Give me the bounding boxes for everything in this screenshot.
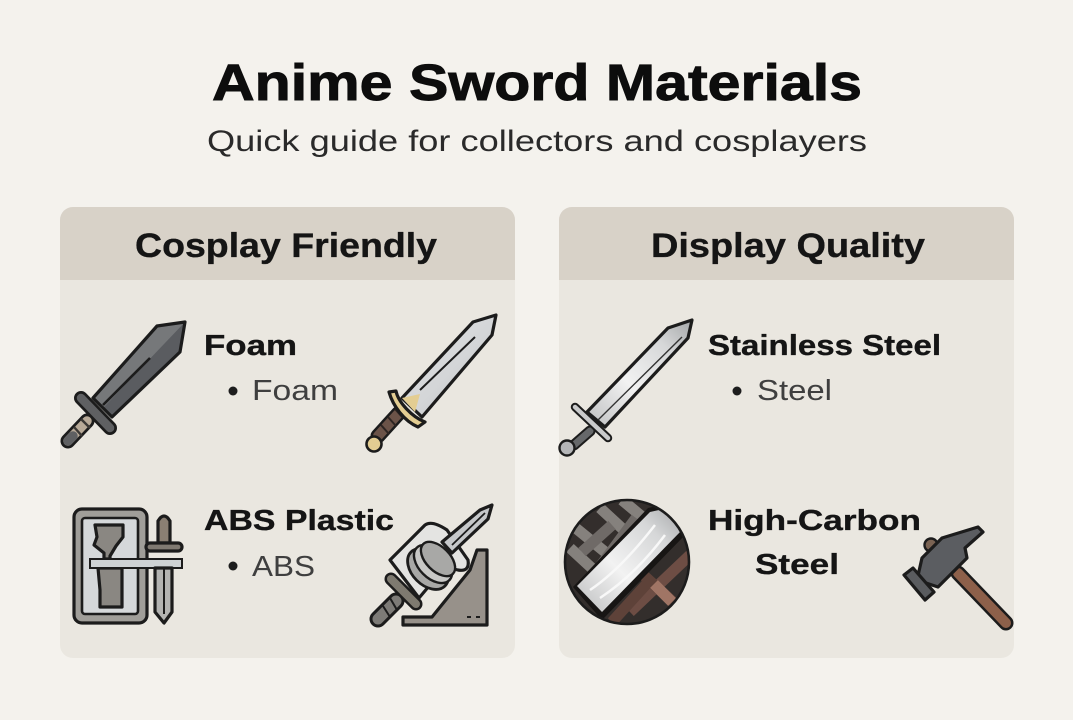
item: stainless steel: Stainless Steel bbox=[708, 330, 941, 362]
panel header: display quality bbox=[559, 207, 1014, 280]
item: foam bbox=[204, 330, 338, 407]
item: abs plastic: ABS bbox=[252, 551, 315, 583]
subtitle: Quick guide for collectors and cosplayers bbox=[207, 125, 867, 158]
panel: cosplay friendly bbox=[60, 207, 515, 658]
icon: folded steel weave bbox=[565, 500, 700, 624]
panel header: cosplay friendly bbox=[60, 207, 515, 280]
item: abs plastic: ABS Plastic bbox=[204, 505, 394, 537]
icon: plastic sword bbox=[366, 315, 496, 452]
item: stainless steel: Steel bbox=[757, 375, 832, 407]
item: foam: Foam bbox=[252, 375, 338, 407]
title: Anime Sword Materials bbox=[212, 54, 862, 111]
icon: sword mold bbox=[74, 509, 182, 623]
panel: display quality bbox=[559, 207, 1014, 658]
item: abs plastic bbox=[204, 505, 394, 583]
icon: stainless steel sword bbox=[560, 320, 692, 456]
icon: foam sword bbox=[68, 322, 185, 441]
panel header: cosplay friendly: Cosplay Friendly bbox=[135, 227, 437, 265]
item: foam: Foam bbox=[204, 330, 297, 362]
item: high-carbon steel: High-Carbon bbox=[708, 505, 921, 537]
item: stainless steel bbox=[708, 330, 941, 407]
icon: hammer bbox=[904, 527, 1006, 623]
panel header: display quality: Display Quality bbox=[651, 227, 925, 265]
item: high-carbon steel bbox=[708, 505, 921, 581]
icon: plastic sword in clamp bbox=[378, 505, 492, 625]
item: high-carbon steel: Steel bbox=[755, 549, 839, 581]
